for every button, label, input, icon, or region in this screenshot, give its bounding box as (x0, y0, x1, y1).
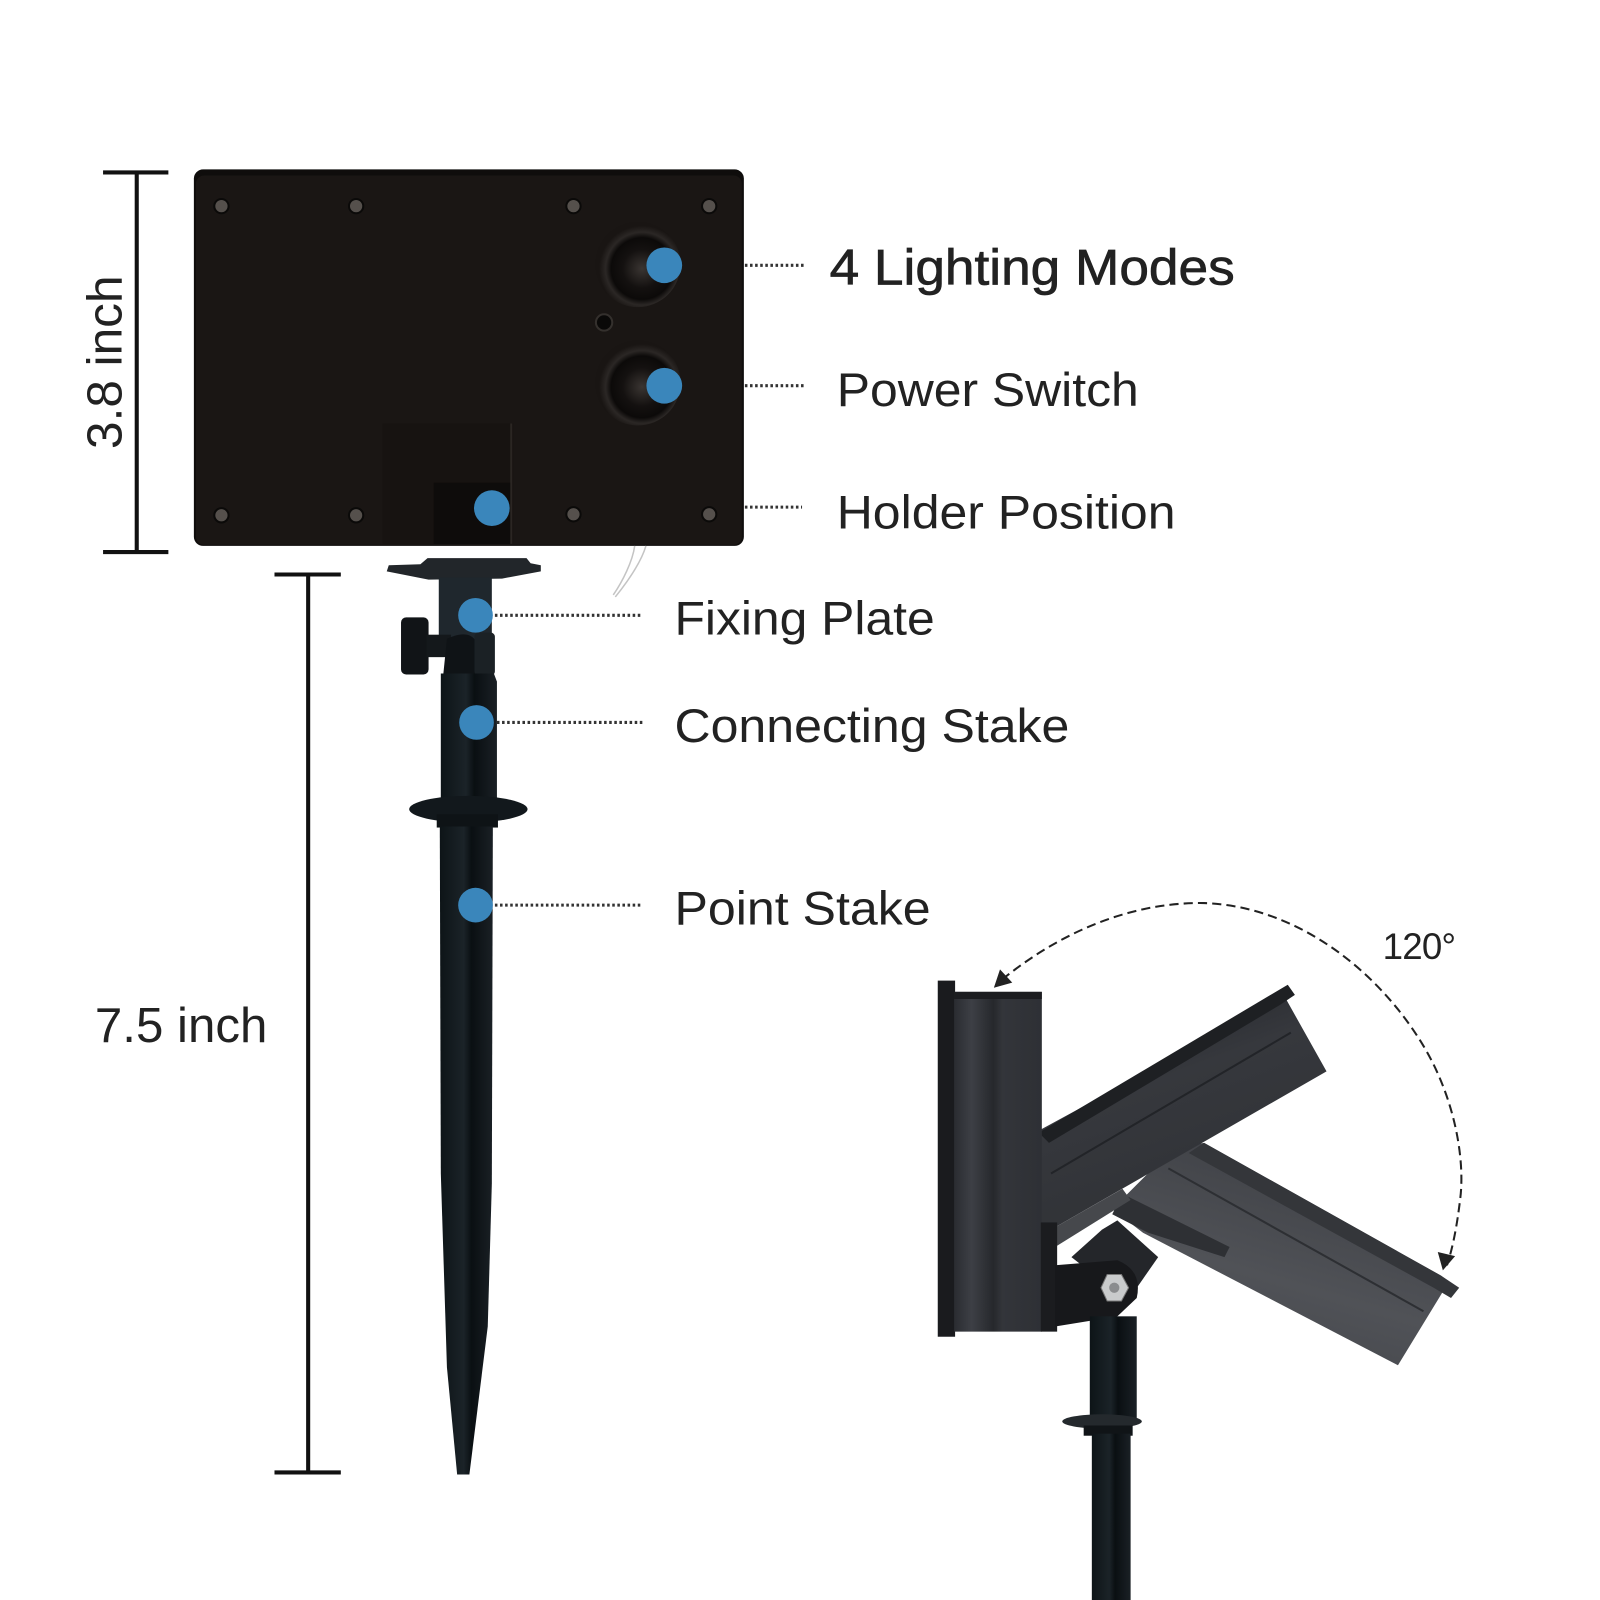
icon: mode switch knob (595, 221, 681, 307)
upper stem (439, 578, 492, 651)
side pole (1090, 1316, 1137, 1418)
fixing plate (387, 558, 541, 580)
callout: connecting stake: Connecting Stake (674, 700, 1069, 752)
callout: holder position (474, 487, 1176, 539)
point spike (440, 827, 493, 1474)
callout: power switch (646, 364, 1139, 416)
lower panel rails (1112, 1194, 1230, 1257)
upper panel rails (1051, 1189, 1131, 1247)
callout: 4 lighting modes (646, 240, 1235, 296)
callout: fixing plate (458, 593, 935, 645)
hex nut (1101, 1274, 1129, 1301)
upper tilted panel (1039, 985, 1327, 1237)
callout: fixing plate: Fixing Plate (674, 593, 935, 645)
label: 120 degrees: 120° (1383, 926, 1456, 967)
pole flange (1062, 1414, 1142, 1436)
callout: holder position: Holder Position (837, 487, 1176, 539)
icon: wires (613, 546, 646, 597)
callout: power switch: Power Switch (837, 364, 1139, 416)
vertical panel (938, 981, 1042, 1337)
side spike (1092, 1434, 1131, 1600)
ground stake (387, 558, 541, 1474)
panel screws (214, 199, 716, 522)
flange disc (409, 796, 528, 828)
connecting tube (441, 673, 497, 804)
lower tilted panel (1112, 1143, 1459, 1365)
callout: point stake (458, 882, 931, 934)
callout: connecting stake (459, 700, 1069, 752)
panel: solar panel back view (194, 169, 744, 546)
arrow: 120 degree arc (994, 903, 1461, 1270)
dimension: 7.5 inch: 7.5 inch (95, 999, 267, 1053)
dimension: 3.8 inch: 3.8 inch (78, 276, 132, 449)
icon: sensor hole (596, 314, 612, 331)
callout: point stake: Point Stake (674, 882, 931, 934)
dimension: 7.5 inch (95, 574, 341, 1472)
side view: tilt range (938, 981, 1459, 1600)
callout: 4 lighting modes: 4 Lighting Modes (830, 240, 1235, 296)
icon: holder slot (434, 483, 510, 544)
hinge bracket (1041, 1220, 1158, 1332)
dimension: 3.8 inch (78, 172, 168, 552)
icon: power switch knob (595, 340, 681, 426)
adjusting knob (401, 617, 495, 679)
